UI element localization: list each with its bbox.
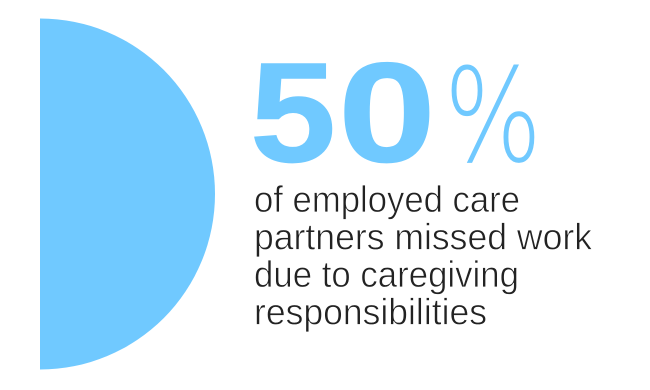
statistic: 50% — [250, 34, 542, 192]
number 50: 0 — [338, 34, 436, 192]
line 2: partners missed work — [254, 216, 592, 258]
line 4: responsibilities — [254, 292, 487, 332]
line 3: due to caregiving — [254, 254, 519, 295]
description text — [254, 179, 592, 332]
number 50: 5 — [250, 34, 336, 192]
line 1: of employed care — [254, 179, 520, 220]
half circle graphic — [40, 18, 215, 370]
percent sign: % — [444, 40, 542, 192]
